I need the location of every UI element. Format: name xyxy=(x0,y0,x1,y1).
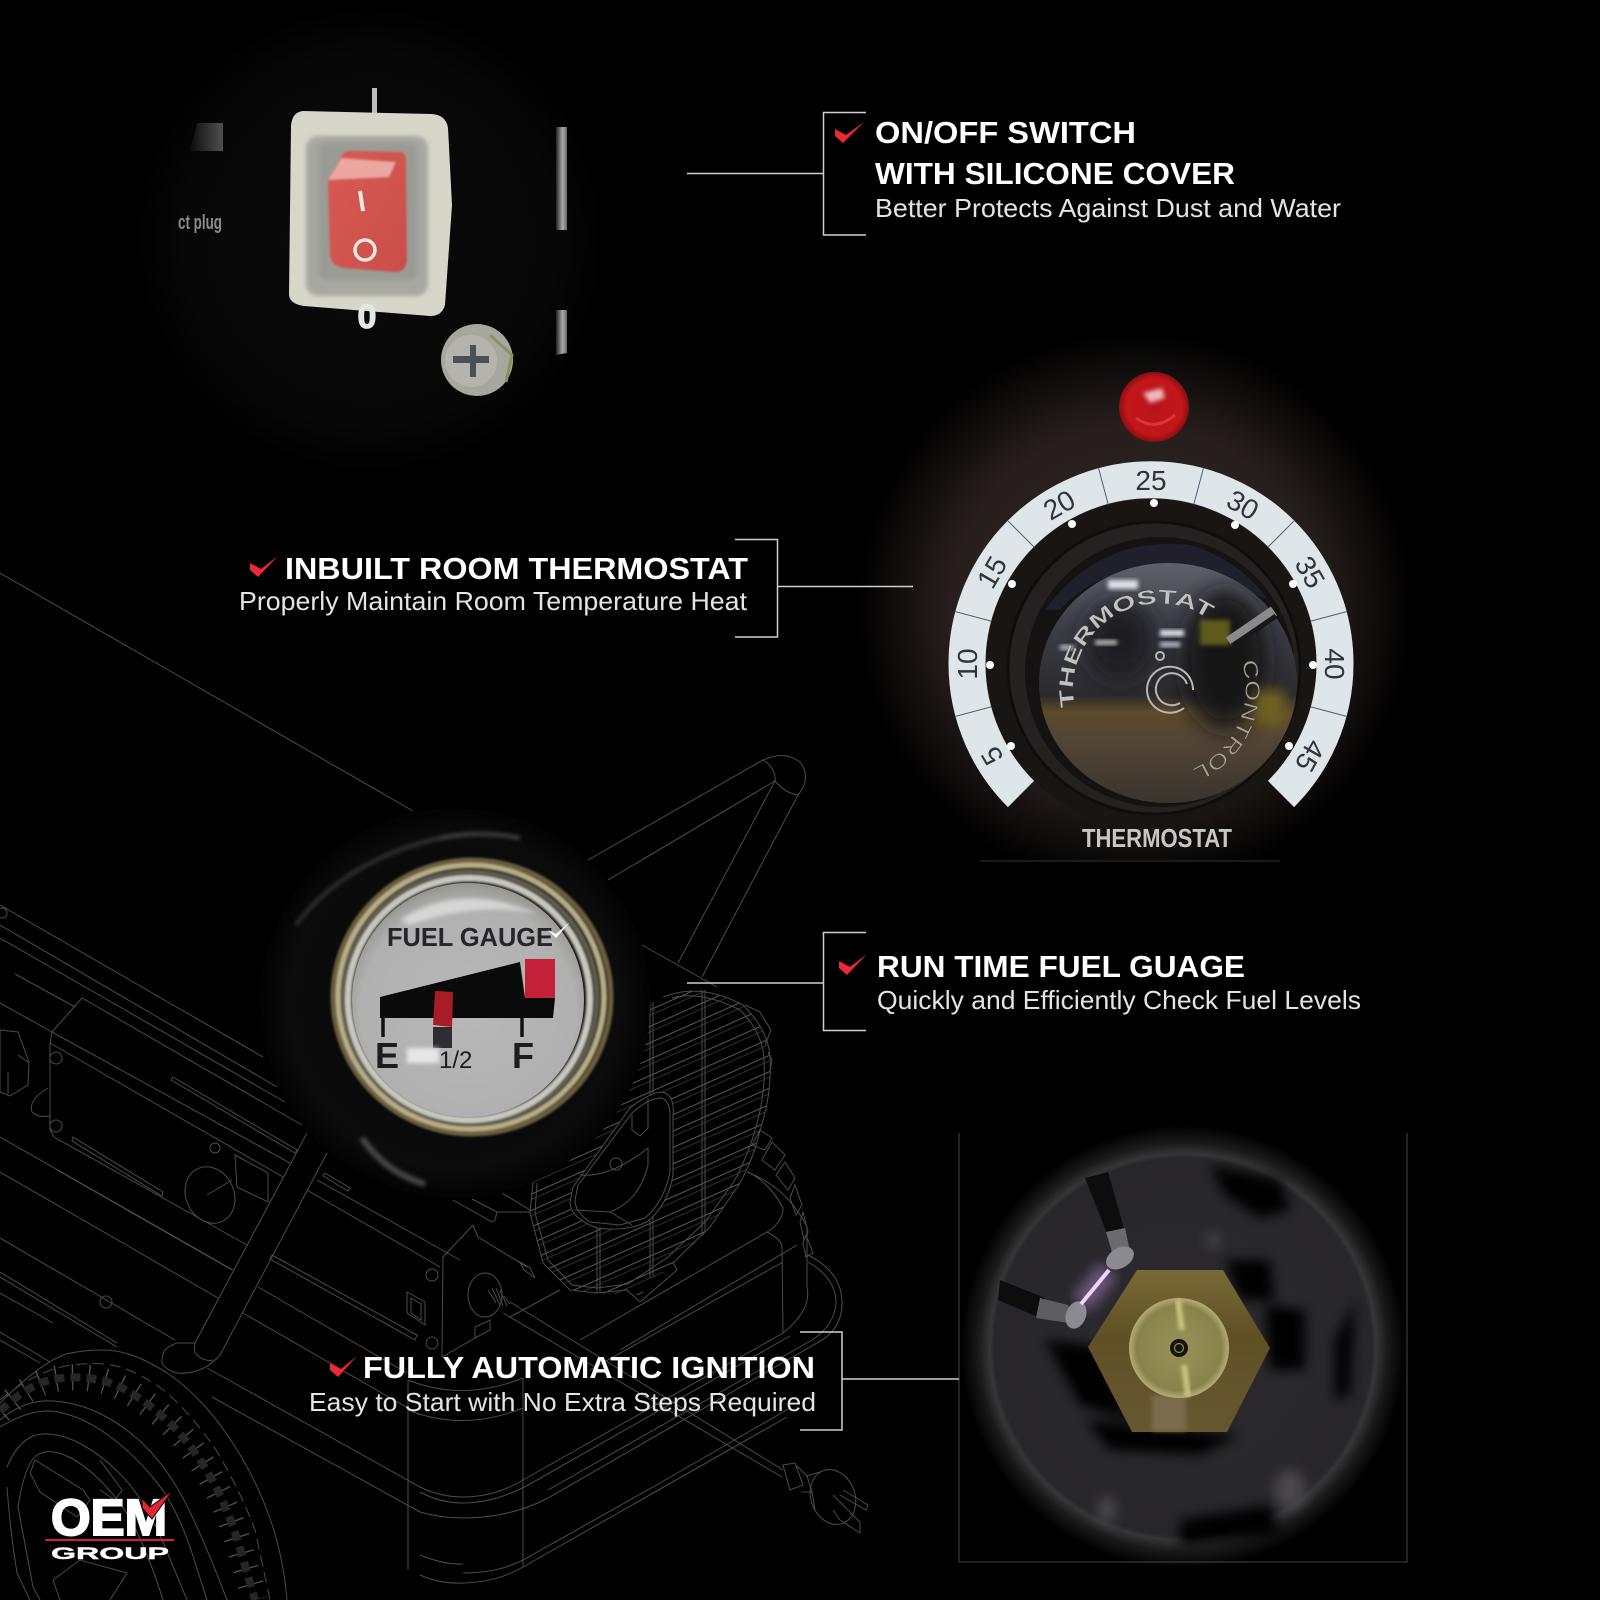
text: fuel gauge: FUEL GAUGE xyxy=(387,922,553,952)
logo: OEM Group xyxy=(45,1489,174,1563)
heading: room thermostat: INBUILT ROOM THERMOSTAT xyxy=(285,551,748,586)
silicone cover xyxy=(289,111,452,316)
scale numbers: 45 xyxy=(1289,735,1331,777)
knob embossed text: THERMOSTAT xyxy=(1059,590,1216,708)
icon: red check xyxy=(330,1356,357,1377)
scale numbers: 30 xyxy=(1222,484,1264,526)
gauge letters xyxy=(375,1035,534,1076)
scale numbers: 25 xyxy=(1135,465,1167,496)
scale dots xyxy=(986,499,1317,750)
panel: ignition photo xyxy=(959,1125,1407,1569)
icon: on marker xyxy=(372,88,377,116)
scale numbers: 15 xyxy=(971,551,1013,593)
glare xyxy=(407,1048,439,1063)
panel xyxy=(407,1193,560,1357)
scale numbers: 20 xyxy=(1038,484,1080,526)
shadows xyxy=(1045,1165,1355,1545)
gauge face xyxy=(352,883,584,1117)
description: Better Protects Against Dust and Water xyxy=(875,193,1341,223)
lighter patches xyxy=(1098,1233,1306,1524)
body side and rear xyxy=(580,1172,808,1370)
handle and foot xyxy=(162,1133,327,1373)
icon: screw xyxy=(441,324,513,396)
description: Properly Maintain Room Temperature Heat xyxy=(239,586,748,616)
slots and knob xyxy=(72,1077,417,1340)
gauge letters: E xyxy=(375,1035,399,1076)
control box xyxy=(50,998,302,1245)
brass nozzle tip xyxy=(1129,1298,1229,1398)
panel: thermostat photo xyxy=(876,351,1394,862)
cover recess xyxy=(306,136,428,296)
icon: red check xyxy=(250,556,278,577)
outer frame xyxy=(212,1255,842,1518)
bezel highlights xyxy=(296,834,520,1184)
icon: glare tick xyxy=(548,922,570,938)
callout: room thermostat xyxy=(239,540,913,637)
needle xyxy=(433,991,453,1048)
text: partial plug label: ct plug xyxy=(178,212,222,234)
callout: fuel gauge xyxy=(687,932,1361,1030)
rocker switch xyxy=(328,151,407,272)
icon: logo check xyxy=(142,1490,173,1519)
brass nozzle hex xyxy=(1088,1270,1270,1432)
side fitting xyxy=(0,1030,50,1116)
icon: red check xyxy=(839,954,867,975)
top handle tube xyxy=(588,755,806,987)
plug xyxy=(803,1463,863,1531)
scale numbers: 40 xyxy=(1319,648,1350,680)
rear tread xyxy=(752,1130,813,1257)
panel: fuel gauge photo xyxy=(260,808,650,1198)
callout: ignition xyxy=(309,1332,959,1430)
description: Easy to Start with No Extra Steps Required xyxy=(309,1387,816,1417)
heading: fuel gauge: RUN TIME FUEL GUAGE xyxy=(877,949,1245,984)
long body lines xyxy=(0,573,460,1415)
description: Quickly and Efficiently Check Fuel Levels xyxy=(877,985,1361,1015)
panel: on/off switch photo xyxy=(135,5,605,475)
logo: OEM Group: OEM xyxy=(51,1489,167,1546)
wheel xyxy=(0,1350,287,1600)
callout: on/off switch xyxy=(687,112,1341,235)
scale numbers: 10 xyxy=(952,648,983,680)
heading: on/off switch: ON/OFF SWITCH xyxy=(875,115,1136,150)
off marker: 0 xyxy=(358,298,376,336)
icon: red check xyxy=(835,122,864,143)
gauge red zone xyxy=(525,959,555,998)
knob base xyxy=(986,499,1316,829)
scale numbers: 35 xyxy=(1289,551,1331,593)
rocker symbols xyxy=(360,191,363,211)
heater line drawing xyxy=(0,573,868,1600)
heading: ignition: FULLY AUTOMATIC IGNITION xyxy=(363,1350,815,1385)
tank xyxy=(408,1378,523,1570)
gauge wedge xyxy=(380,962,555,1018)
ticks xyxy=(383,1018,522,1037)
grill xyxy=(530,992,770,1295)
thermostat knob xyxy=(1039,563,1297,803)
icon: right edge highlights xyxy=(556,127,567,355)
electrodes xyxy=(998,1172,1138,1332)
heading line two: WITH SILICONE COVER xyxy=(875,156,1235,191)
logo subtitle: GROUP xyxy=(51,1544,169,1563)
control text: CONTROL xyxy=(1193,661,1260,777)
scale numbers xyxy=(952,465,1350,777)
spark arc xyxy=(1081,1270,1109,1304)
knob pointer xyxy=(1229,611,1274,642)
icon: red indicator lamp xyxy=(1119,372,1189,442)
icon: left square mark xyxy=(190,123,223,151)
gauge letters: F xyxy=(512,1035,534,1076)
gauge metal ring xyxy=(333,860,611,1134)
scale numbers: 5 xyxy=(975,741,1009,770)
degree C mark xyxy=(1147,652,1193,713)
text: thermostat label: THERMOSTAT xyxy=(1082,823,1232,853)
temperature scale ring xyxy=(952,465,1350,794)
logo rule xyxy=(45,1539,174,1541)
handle plate on grill xyxy=(570,1092,673,1229)
gauge letters: 1/2 xyxy=(439,1047,472,1074)
